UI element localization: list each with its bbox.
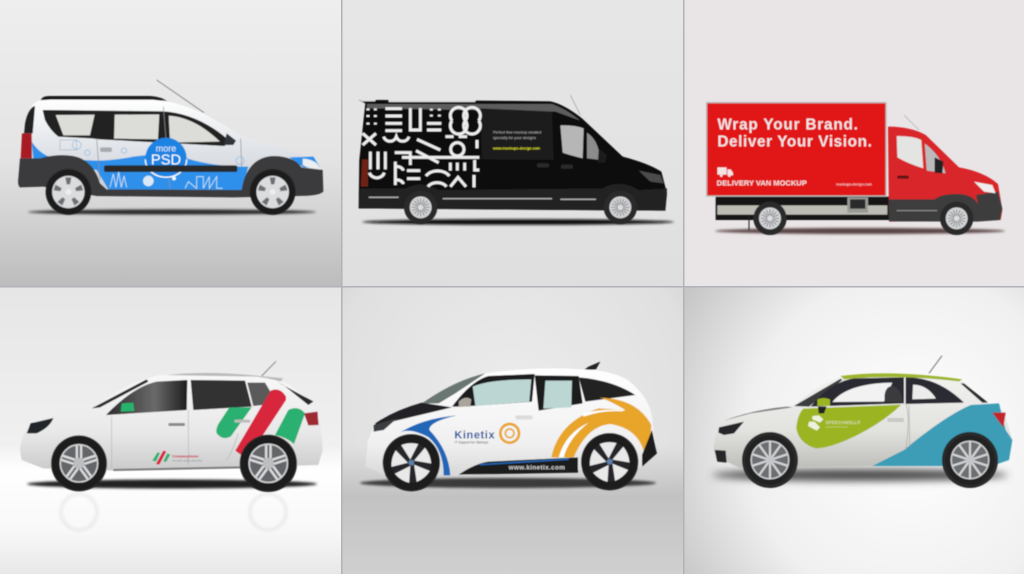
logo: more PSD: more: [156, 144, 176, 154]
ground shadow: [362, 219, 674, 225]
van body: [359, 95, 667, 224]
box headline: Deliver Your Vision.: [717, 134, 872, 151]
blue arch swoosh: [399, 415, 457, 475]
Kinetix logo: Kinetix: [454, 430, 495, 442]
box footer text: DELIVERY VAN MOCKUP: [717, 178, 807, 187]
lower website strip: www.kinetix.com: [508, 465, 565, 472]
box body: [707, 103, 886, 196]
wheels: estate car: [46, 169, 295, 215]
lower website strip: [459, 457, 578, 475]
white geometric wrap pattern: [363, 107, 480, 187]
panel: white SUV with green and red wrap: [0, 287, 342, 574]
van panel copy: specially for your designs: [493, 136, 536, 140]
box headline: Wrap Your Brand.: [717, 116, 859, 133]
cab: [888, 127, 1002, 222]
box footer text: mockups-design.com: [836, 183, 872, 187]
hatchback vehicle: [365, 362, 657, 491]
door handle and seam details: [60, 107, 244, 188]
company logo: [152, 451, 203, 465]
panel: white electric hatchback with Kinetix wrap: [342, 287, 684, 574]
icon: delivery truck: [717, 167, 733, 177]
orange swoosh: [551, 398, 651, 457]
logo: more PSD: [145, 138, 187, 179]
ground shadow: [28, 209, 316, 215]
green wrap and Speechwell logo: [796, 405, 901, 448]
green wrap and Speechwell logo: SPEECHWELL®: [826, 420, 861, 425]
panel: red box truck: [684, 0, 1024, 287]
teal wrap: [872, 403, 1012, 466]
box footer text: [717, 178, 872, 187]
green wrap and Speechwell logo: Communication Centre: [826, 426, 849, 429]
van panel copy: www.mockups-design.com: [492, 147, 541, 151]
company logo: Company slogan goes here: [172, 460, 203, 463]
box headline: [717, 116, 872, 151]
ground shadow: [715, 228, 1005, 234]
truck vehicle: [707, 103, 1002, 235]
van panel copy: [492, 131, 541, 151]
reflection of the wheels: [61, 494, 286, 530]
van panel copy: Perfect free mockup created: [493, 131, 541, 135]
chassis: [716, 197, 891, 230]
logo: more PSD: PSD: [151, 152, 181, 168]
company logo: CompanyName: [172, 454, 199, 458]
green and red wrap shapes: [216, 390, 305, 457]
estate car vehicle: [18, 80, 323, 197]
Kinetix logo: IT Support for Startups: [455, 440, 489, 444]
ground shadow: [712, 469, 1008, 481]
compact hatchback vehicle: [713, 356, 1012, 488]
SUV vehicle: [20, 361, 323, 492]
panel: black patterned van: [342, 0, 684, 287]
panel: compact hatchback with green and teal wrap: [684, 287, 1024, 574]
Kinetix logo: [454, 424, 519, 444]
ground shadow: [360, 478, 656, 488]
panel: estate car with blue wrap: [0, 0, 342, 287]
ground shadow: [27, 480, 317, 488]
